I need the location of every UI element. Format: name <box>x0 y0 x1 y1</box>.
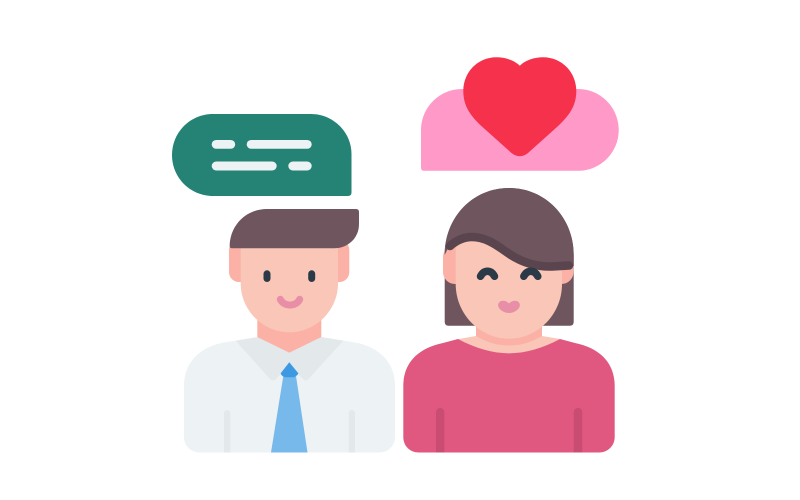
woman sweater <box>403 339 615 452</box>
man face <box>241 235 338 332</box>
icon: heart <box>463 57 576 156</box>
man smile <box>280 299 300 305</box>
speech bubble: man <box>172 114 352 196</box>
woman neck <box>476 320 542 346</box>
man tie <box>271 376 308 452</box>
man eyes <box>264 270 315 282</box>
woman ears <box>443 245 574 284</box>
woman mouth <box>498 301 520 313</box>
woman hair band <box>450 237 569 267</box>
woman hair top <box>445 188 574 266</box>
man shirt <box>184 337 395 452</box>
woman eyes <box>480 271 538 276</box>
woman face <box>456 230 562 339</box>
woman neck collar <box>456 336 560 353</box>
man tie knot <box>281 362 298 377</box>
woman figure <box>403 188 615 452</box>
speech bubble: woman <box>421 89 619 171</box>
woman sleeve lines <box>436 408 582 452</box>
woman hair back <box>445 188 574 326</box>
man ears <box>229 240 349 282</box>
man collar <box>236 337 343 380</box>
man sleeve lines <box>224 410 355 452</box>
man figure <box>184 209 395 452</box>
man neck <box>257 320 321 353</box>
man hair <box>230 209 359 248</box>
